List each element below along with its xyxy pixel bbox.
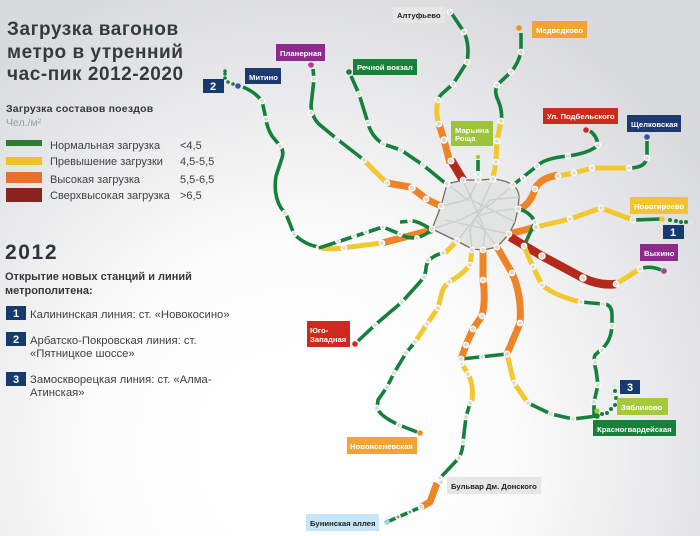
label: Novogireevo	[630, 197, 688, 214]
label: Bulvar Dm. Donskogo: Бульвар Дм. Донского	[451, 482, 537, 491]
new stations list: Арбатско-Покровская линия: ст.	[30, 335, 197, 347]
label: Shchelkovskaya	[627, 115, 681, 132]
badge 3	[620, 380, 640, 394]
label: Vykhino: Выхино	[644, 249, 675, 258]
line: Planernaya	[308, 69, 444, 209]
new stations list: 2	[13, 334, 19, 346]
label: Buninskaya alleya: Бунинская аллея	[310, 519, 375, 528]
new stations list: «Пятницкое шоссе»	[30, 348, 135, 360]
legend: Нормальная загрузка	[50, 140, 161, 152]
label: Buninskaya alleya	[306, 514, 379, 531]
line: Shchelkovskaya	[516, 141, 650, 212]
new section: Alma-Atinskaya	[600, 384, 618, 416]
legend: Чел./м²	[6, 117, 42, 129]
label: Bulvar Dm. Donskogo	[447, 477, 541, 494]
line: Lyublinskaya to Krasnogvardeyskaya	[461, 243, 615, 416]
new section: Novokosino	[668, 218, 693, 225]
legend: Превышение загрузки	[50, 156, 163, 168]
badge 2: 2	[210, 81, 216, 93]
label: Yugo-Zapadnaya: Юго-	[310, 326, 329, 335]
new section: Pyatnitskoe shosse	[223, 64, 235, 86]
line: Zamoskvoretskaya south	[387, 247, 486, 522]
label: Rechnoy vokzal	[353, 59, 417, 75]
new stations list	[5, 271, 230, 399]
new stations list: Калининская линия: ст. «Новокосино»	[30, 309, 230, 321]
legend: <4,5	[180, 140, 202, 152]
label: Medvedkovo	[532, 21, 587, 38]
badge 1	[663, 225, 684, 239]
label: Medvedkovo: Медведково	[536, 26, 583, 35]
label: Altufyevo: Алтуфьево	[397, 11, 441, 20]
legend: 5,5-6,5	[180, 174, 214, 186]
line: Vykhino	[510, 237, 661, 287]
label: Zyablikovo: Зябликово	[621, 403, 663, 412]
legend	[6, 103, 214, 202]
badge 1: 1	[670, 227, 676, 239]
heading: 2012: 2012	[5, 241, 58, 264]
label: Zyablikovo	[617, 398, 668, 415]
line: Ul. Podbelskogo	[510, 131, 601, 188]
new stations list: 1	[13, 308, 19, 320]
label: Krasnogvardeyskaya	[593, 420, 676, 436]
label: Planernaya: Планерная	[280, 49, 322, 58]
badge 3: 3	[627, 382, 633, 394]
label: Novoyasenevskaya	[347, 437, 417, 454]
new stations list: Атинская»	[30, 387, 85, 399]
legend: Сверхвысокая загрузка	[50, 190, 171, 202]
line: Yugo-Zapadnaya	[358, 238, 460, 341]
ring stations	[429, 176, 521, 237]
line: Medvedkovo	[490, 33, 524, 182]
line: Serpukhovskaya	[494, 244, 597, 422]
new stations list: Замоскворецкая линия: ст. «Алма-	[30, 374, 212, 386]
central ring area	[432, 179, 519, 250]
line: Novoyasenevskaya	[374, 247, 475, 432]
legend: Загрузка составов поездов	[6, 103, 154, 115]
new stations list: Открытие новых станций и линий	[5, 271, 192, 283]
new stations list: 3	[13, 374, 19, 386]
label: Shchelkovskaya: Щелковская	[631, 120, 678, 129]
title	[7, 19, 184, 85]
line: Novogireevo	[506, 205, 660, 246]
legend: Высокая загрузка	[50, 174, 141, 186]
label: Planernaya	[276, 44, 325, 61]
label: Krasnogvardeyskaya: Красногвардейская	[597, 425, 672, 434]
title: метро в утренний	[7, 42, 184, 63]
label: Mitino	[245, 68, 281, 84]
legend: >6,5	[180, 190, 202, 202]
legend: 4,5-5,5	[180, 156, 214, 168]
label: Maryina Roshcha: Роща	[455, 134, 476, 143]
label: Novogireevo: Новогиреево	[634, 202, 684, 211]
label: Altufyevo	[393, 7, 445, 23]
line: Arbatsko-Pokrovskaya branch	[319, 219, 432, 248]
new stations list: метрополитена:	[5, 285, 93, 297]
label: Yugo-Zapadnaya	[307, 321, 350, 347]
label: Ul. Podbelskogo: Ул. Подбельского	[547, 112, 615, 121]
line: Maryina Roshcha	[475, 155, 481, 183]
line: Mitino	[243, 87, 432, 251]
title: Загрузка вагонов	[7, 19, 179, 40]
label: Maryina Roshcha: Марьина	[455, 126, 490, 135]
label: Yugo-Zapadnaya: Западная	[310, 335, 346, 344]
label: Ul. Podbelskogo	[543, 108, 618, 124]
label: Mitino: Митино	[249, 73, 278, 82]
terminal stations	[235, 25, 667, 525]
badge 2	[203, 79, 224, 93]
title: час-пик 2012-2020	[7, 64, 184, 85]
label: Maryina Roshcha	[451, 121, 493, 146]
label: Rechnoy vokzal: Речной вокзал	[357, 63, 413, 72]
line: Altufyevo	[435, 9, 470, 183]
label: Novoyasenevskaya: Новоясеневская	[350, 442, 413, 451]
label: Vykhino	[640, 244, 678, 261]
line: Rechnoy vokzal	[351, 76, 450, 187]
